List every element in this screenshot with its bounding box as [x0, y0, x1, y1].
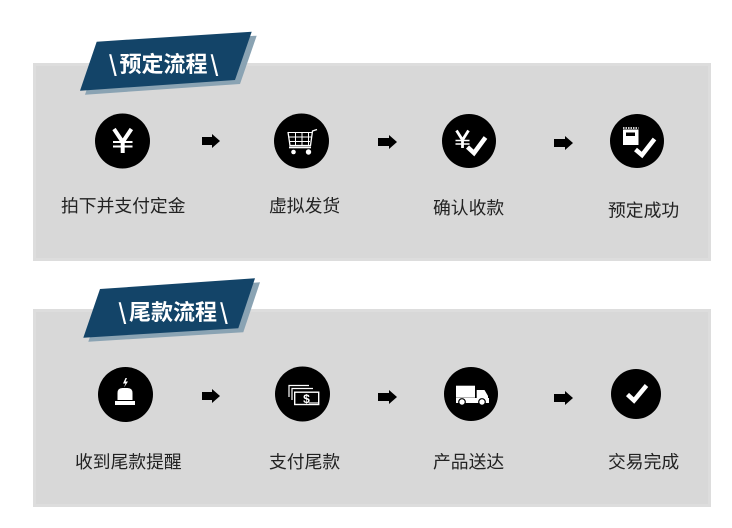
label: pay balance: 支付尾款 — [269, 452, 340, 472]
label: confirm: 确认收款 — [433, 198, 504, 218]
label: pay: 拍下并支付定金 — [61, 196, 186, 216]
label: reminder: 收到尾款提醒 — [75, 452, 182, 472]
icon: alarm bell — [98, 367, 153, 422]
arrow — [554, 391, 573, 405]
icon: yen — [95, 114, 150, 168]
banner: booking process heading — [80, 32, 257, 95]
label: shipping: 虚拟发货 — [269, 196, 340, 216]
arrow — [202, 134, 220, 148]
panel: final payment process — [33, 278, 711, 507]
arrow — [554, 136, 573, 150]
icon: shopping cart — [274, 114, 329, 168]
icon: yen with check — [442, 114, 496, 168]
label: booked: 预定成功 — [608, 200, 679, 220]
panel: booking process — [33, 32, 711, 261]
icon: banknotes — [275, 366, 330, 422]
label: delivered: 产品送达 — [433, 452, 504, 472]
icon: banknotes: $ — [303, 392, 310, 406]
banner: booking process heading: \预定流程\ — [108, 47, 219, 79]
arrow — [202, 389, 220, 403]
icon: notepad with check — [610, 114, 664, 168]
banner: final payment heading — [83, 278, 260, 342]
arrow — [378, 135, 397, 149]
icon: delivery truck — [444, 367, 498, 421]
label: complete: 交易完成 — [608, 452, 679, 472]
icon: check — [611, 369, 661, 419]
arrow — [378, 390, 397, 404]
banner: final payment heading: \尾款流程\ — [118, 295, 229, 327]
